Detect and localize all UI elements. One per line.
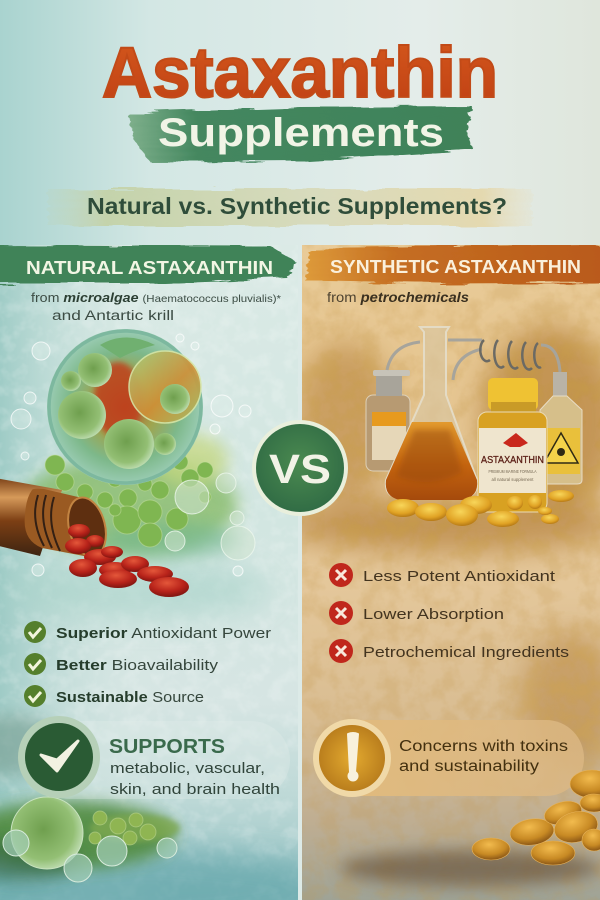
- illustration: water droplets: [11, 334, 251, 576]
- supplement jar: ASTAXANTHIN: [481, 454, 544, 466]
- drawback: lower absorption: [329, 601, 504, 625]
- illustration: lab glassware: [366, 327, 582, 527]
- illustration: amber softgels: [472, 770, 600, 865]
- subtitle banner: [128, 106, 474, 162]
- illustration: algae pile: [22, 434, 255, 560]
- drawback: less potent antioxidant: [329, 563, 556, 587]
- illustration: red softgels: [65, 524, 189, 597]
- drawback: petrochemical ingredients: [329, 639, 569, 663]
- header bar: synthetic: SYNTHETIC ASTAXANTHIN: [330, 257, 581, 277]
- supports callout: [18, 716, 290, 799]
- concerns callout: [313, 719, 584, 797]
- right bottle: [540, 372, 582, 484]
- subtitle banner: Supplements: [158, 111, 444, 155]
- benefit list: [24, 621, 271, 707]
- drawback: lower absorption: Lower Absorption: [363, 606, 504, 623]
- vs badge: VS: [269, 446, 331, 492]
- illustration: microalgae sphere: [47, 329, 203, 485]
- illustration: spilled bottle: [0, 478, 112, 560]
- source text: natural: [31, 292, 281, 320]
- concerns callout: and sustainability: [399, 758, 539, 775]
- golden softgels: [387, 490, 574, 527]
- drawback list: [329, 563, 569, 663]
- panel: synthetic astaxanthin: [302, 245, 600, 900]
- supports callout: metabolic, vascular,: [110, 760, 265, 777]
- benefit: sustainable source: [24, 685, 204, 707]
- vs badge: [252, 420, 348, 516]
- title: Astaxanthin: [102, 34, 498, 113]
- header bar: natural: [0, 245, 296, 283]
- question strip: Natural vs. Synthetic Supplements?: [87, 193, 507, 219]
- benefit: sustainable source: Sustainable Source: [56, 689, 204, 706]
- source text: natural: from microalgae (Haematococcus pluvialis)*: [31, 290, 281, 305]
- benefit: better bioavailability: [24, 653, 219, 675]
- conical flask: [386, 327, 477, 500]
- panel: natural astaxanthin: [0, 245, 298, 900]
- concerns callout: Concerns with toxins: [399, 738, 568, 755]
- supplement jar: all natural supplement: [492, 477, 534, 482]
- header bar: natural: NATURAL ASTAXANTHIN: [26, 257, 273, 278]
- illustration: algae at bottom: [0, 797, 180, 882]
- supplement jar: PREMIUM MARINE FORMULA: [488, 469, 536, 474]
- supplement jar: [478, 378, 547, 512]
- supports callout: skin, and brain health: [110, 781, 280, 798]
- source text: synthetic: from petrochemicals: [327, 290, 470, 305]
- benefit: superior antioxidant power: [24, 621, 271, 643]
- source text: natural: and Antartic krill: [52, 308, 174, 323]
- drawback: petrochemical ingredients: Petrochemical Ingredients: [363, 644, 569, 661]
- supports callout: SUPPORTS: [109, 736, 225, 758]
- benefit: superior antioxidant power: Superior Antioxidant Power: [56, 625, 271, 642]
- benefit: better bioavailability: Better Bioavailability: [56, 657, 219, 674]
- left bottle: [366, 370, 410, 471]
- glass tubing: [387, 340, 560, 380]
- question strip: [48, 189, 532, 226]
- drawback: less potent antioxidant: Less Potent Antioxidant: [363, 568, 556, 585]
- header bar: synthetic: [305, 245, 600, 284]
